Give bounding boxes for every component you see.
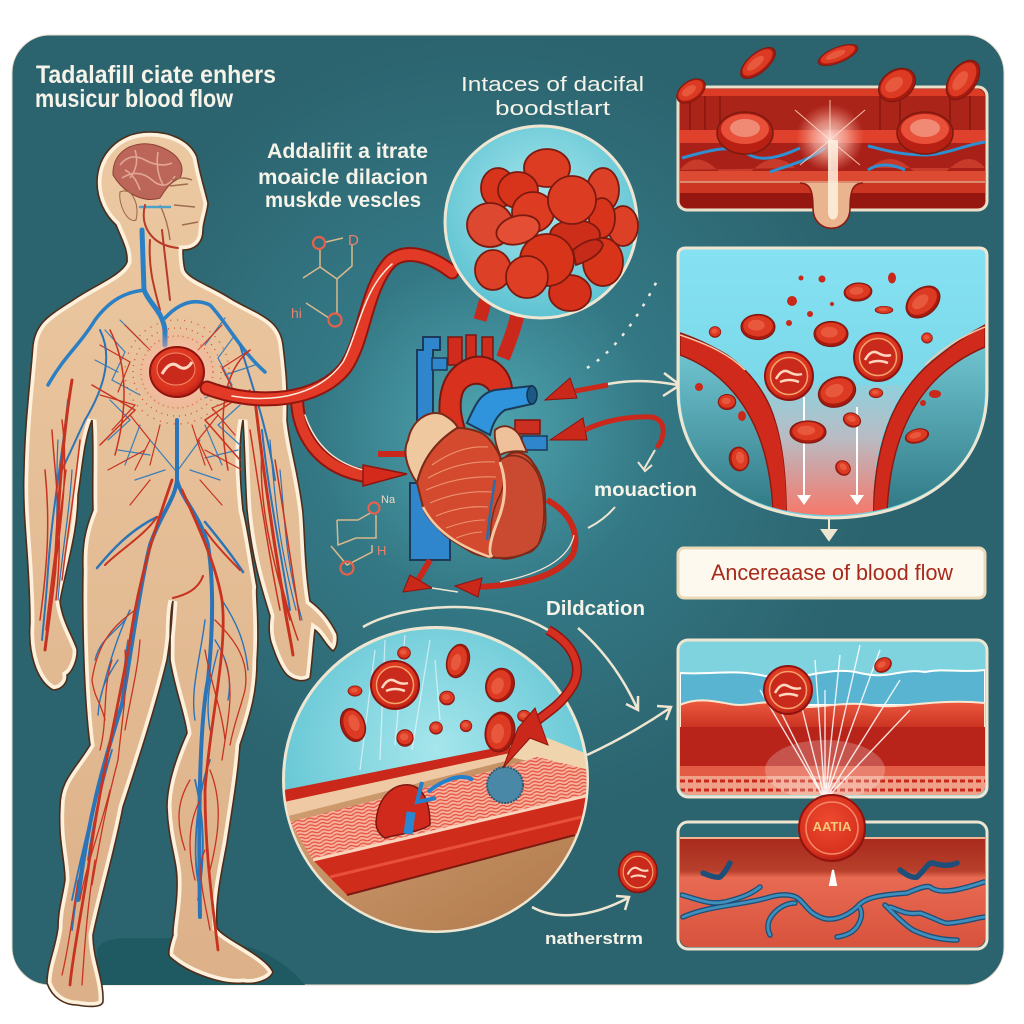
molecule: lower: H: [377, 543, 386, 558]
heart illustration: [378, 335, 547, 560]
panel: vessel top: [678, 87, 987, 228]
arrow: natherstrm curve: [532, 896, 629, 915]
title line 2: musicur blood flow: [35, 85, 233, 113]
leader stroke: [588, 507, 615, 528]
veins: neck and head: [48, 205, 265, 385]
aortic branches: [448, 335, 493, 365]
pulmonary blue: [467, 386, 532, 435]
seal: tablet between panels: [799, 795, 865, 861]
label box: increase of blood flow: Ancereaase of blood flow: [711, 560, 953, 585]
seal: tablet between panels: AATIA: [813, 819, 852, 834]
dotted connector: [587, 275, 660, 368]
arrow: dildcation pointer: [578, 628, 638, 710]
aorta arch: [439, 357, 512, 432]
arrow: to lower panel: [587, 706, 671, 755]
arrow: heart loop: [403, 500, 575, 597]
label box: increase of blood flow: [678, 548, 985, 598]
vena cava: [410, 337, 450, 560]
panel: vessel dilation: [678, 640, 987, 800]
cells in vessel: [717, 112, 773, 154]
arrow: heart to top: [545, 373, 680, 471]
label: dildcation: Dildcation: [546, 598, 645, 620]
body silhouette: [24, 132, 337, 1006]
circle: vessel wall: [284, 628, 590, 940]
molecule: upper: D: [348, 232, 359, 249]
muscle fibres: [426, 447, 496, 538]
floor shadow: [97, 938, 305, 985]
right atrium cream: [495, 426, 527, 455]
label: circle heading: Intaces of dacifal: [461, 74, 644, 96]
label: circle heading: [461, 74, 644, 120]
label: dilation heading: muskde vescles: [265, 189, 421, 212]
floating tablet: [619, 852, 657, 892]
arrow: artery from chest: [207, 255, 452, 486]
arrow: big red pointer: [363, 607, 577, 768]
brain: [113, 144, 182, 199]
heart glow: [135, 330, 219, 414]
circle: clumped blood cells: [445, 126, 638, 318]
label: circle heading: boodstlart: [495, 98, 611, 120]
right ventricle: [490, 456, 544, 558]
veins: chest network: [95, 318, 255, 505]
channel stem: [800, 183, 863, 228]
granular cell: [487, 767, 523, 803]
label: dilation heading: Addalifit a itrate: [267, 140, 428, 163]
molecule: upper: [291, 232, 359, 326]
label: natherstrm: natherstrm: [545, 929, 643, 948]
right vessels: [515, 420, 540, 434]
arrow: to label: [822, 519, 836, 540]
human figure: [24, 132, 337, 1006]
molecule: lower: [331, 494, 396, 574]
mini organ: [376, 785, 430, 838]
red cell cluster: [467, 149, 638, 311]
tablet on chest: [150, 347, 204, 397]
label: mouaction: mouaction: [594, 480, 697, 501]
face lines: [160, 178, 198, 240]
veins: blue network: [42, 330, 302, 930]
molecule: upper: hi: [291, 305, 302, 321]
body inner highlight: [24, 132, 337, 1006]
ear: [120, 191, 137, 221]
chest speckle: [125, 320, 229, 424]
label: dilation heading: [258, 140, 428, 212]
left atrium cream: [405, 413, 458, 483]
title: Tadalafill ciate enhers: [36, 61, 276, 89]
panel: blue veins: [678, 822, 987, 949]
body outline: [24, 132, 337, 1006]
panel: U vessel: [678, 248, 987, 518]
floating cells top: [672, 40, 987, 109]
ventricle body: [417, 428, 546, 559]
molecule: lower: Na: [381, 494, 396, 506]
veins: red network: [40, 330, 300, 985]
blue arrow: [417, 777, 473, 802]
tube from cluster: [480, 285, 490, 320]
arrow: artery from circle to heart: [503, 300, 520, 358]
label: dilation heading: moaicle dilacion: [258, 166, 428, 189]
cells: [695, 272, 946, 479]
